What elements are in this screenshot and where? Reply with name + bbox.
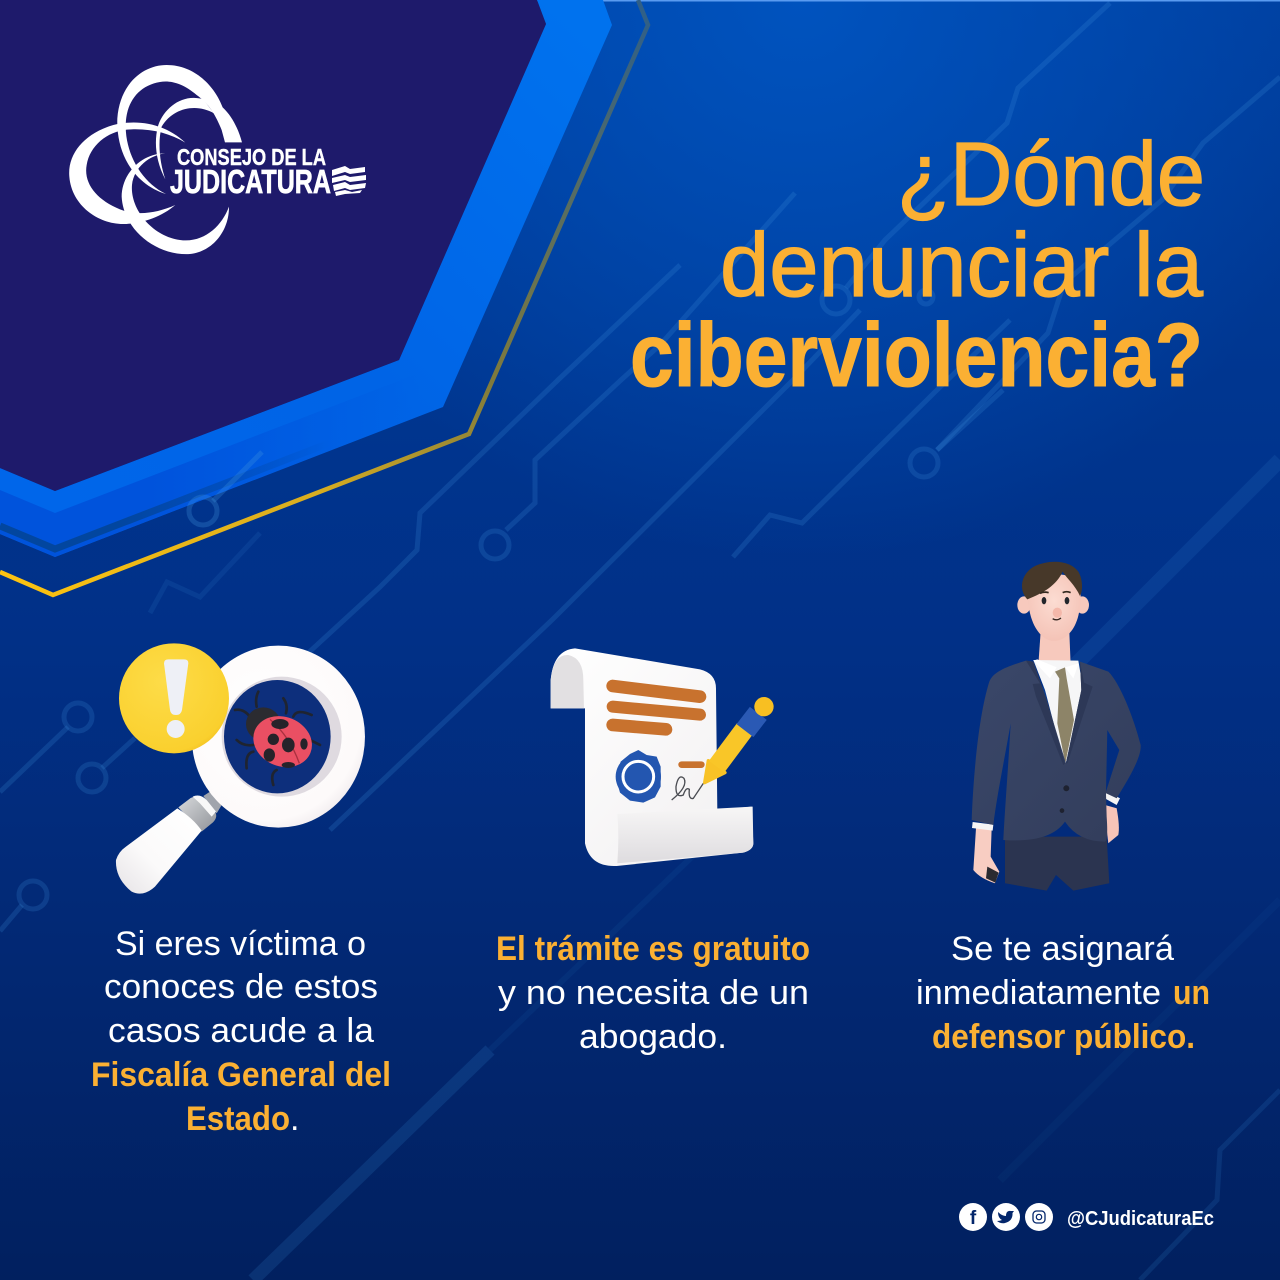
logo flag <box>332 166 366 196</box>
collar <box>1033 659 1079 678</box>
icon: instagram <box>1025 1203 1053 1231</box>
text block: column 2: y no necesita de un <box>498 974 809 1012</box>
text block: column 2 <box>496 930 810 1056</box>
text block: column 3: Se te asignará <box>951 930 1174 968</box>
text block: column 1: Fiscalía General del <box>91 1056 391 1094</box>
icon: facebook: f <box>970 1208 977 1229</box>
title: ciberviolencia? <box>630 306 1203 406</box>
social handle: @CJudicaturaEc <box>1067 1208 1214 1230</box>
gold accent line <box>0 0 648 595</box>
illustration: man in suit <box>972 562 1141 891</box>
paper scroll <box>551 648 753 866</box>
tie <box>1055 667 1074 763</box>
title: denunciar la <box>720 216 1204 316</box>
shorts <box>1005 837 1109 891</box>
social footer <box>959 1203 1214 1231</box>
text block: column 3: inmediatamente <box>916 974 1161 1012</box>
corner shape: navy panel <box>0 0 546 491</box>
icon: twitter <box>992 1203 1020 1231</box>
logo: Consejo de la Judicatura: JUDICATURA <box>170 163 331 200</box>
text block: column 1: Si eres víctima o <box>115 925 366 963</box>
hands <box>973 805 1119 883</box>
text block: column 1 <box>91 925 391 1138</box>
head <box>1017 562 1089 641</box>
icon: facebook <box>959 1203 987 1231</box>
text block: column 1: . <box>290 1100 299 1138</box>
text block: column 2: abogado. <box>579 1018 727 1056</box>
text block: column 1: casos acude a la <box>108 1012 374 1050</box>
alert badge <box>119 643 229 753</box>
shirt <box>1033 660 1083 767</box>
icon: magnifying glass with ladybug and alert <box>116 643 365 894</box>
handle <box>116 790 223 894</box>
signature <box>672 777 703 800</box>
circuit node on blue band <box>189 452 262 525</box>
title <box>630 125 1205 406</box>
shirt cuffs <box>972 792 1120 831</box>
logo: Consejo de la Judicatura <box>69 65 366 254</box>
icon: signed document with pen <box>551 648 774 866</box>
text block: column 2: El trámite es gratuito <box>496 930 810 968</box>
seal <box>616 750 661 803</box>
buttons <box>1060 785 1069 813</box>
text block: column 3 <box>916 930 1210 1056</box>
corner shape: bright blue band <box>0 0 612 557</box>
lens <box>192 646 365 828</box>
lapels <box>1026 661 1093 765</box>
text block: column 1: Estado <box>186 1100 290 1138</box>
text block: column 3: un <box>1173 974 1210 1012</box>
pen <box>705 697 774 783</box>
text block: column 3: defensor público. <box>932 1018 1195 1056</box>
text block: column 1: conoces de estos <box>104 968 378 1006</box>
logo emblem arcs <box>69 65 242 254</box>
ladybug <box>235 692 320 785</box>
neck <box>1038 632 1071 665</box>
title: ¿Dónde <box>897 125 1205 225</box>
text lines <box>613 686 701 765</box>
jacket <box>972 661 1141 842</box>
logo wordmark: CONSEJO DE LA <box>177 144 326 170</box>
